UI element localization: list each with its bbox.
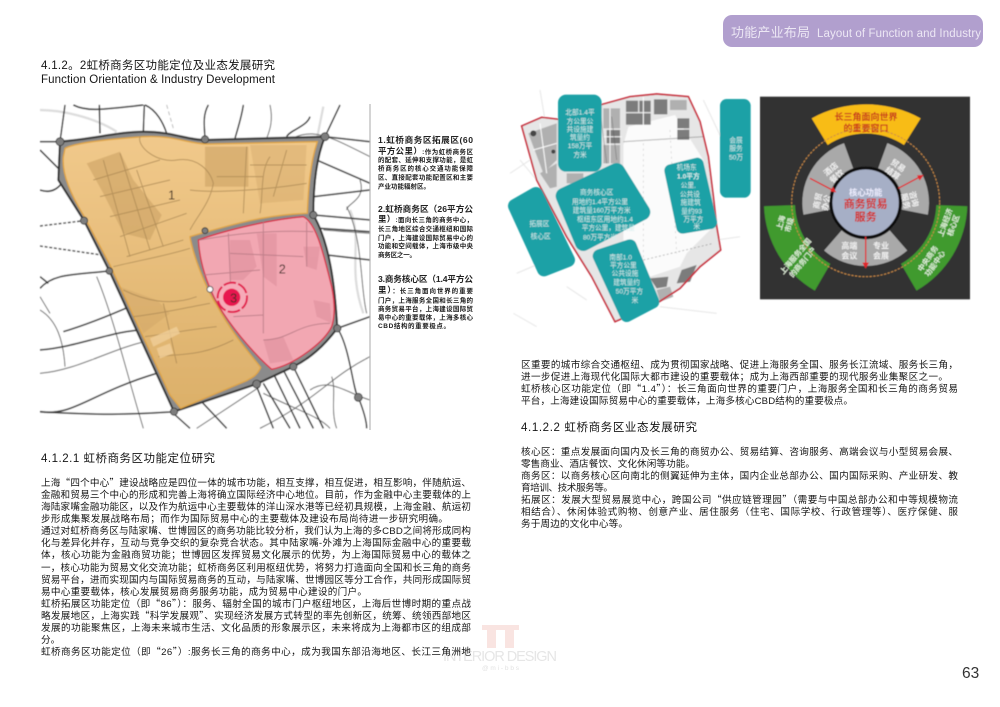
gray sector: upper right: 咨询 bbox=[907, 190, 921, 208]
callout: south: 建筑量约 bbox=[613, 277, 640, 286]
header tag: Layout of Function and Industry: Layout of Function and Industry bbox=[817, 28, 981, 40]
map legend text panel: 门户，上海建设国际贸易中心的 bbox=[378, 233, 474, 242]
gray sector: bottom: 会议 bbox=[841, 250, 857, 260]
page number: 63 bbox=[962, 665, 979, 682]
map zone labels bbox=[168, 188, 286, 306]
body text: right column bottom: 相结合）、休闲体验式购物、创意产业、居住服务（住宅、国际学校、行政管理等）、医疗保健、服 bbox=[521, 506, 958, 518]
gray sector: bottom: 会展 bbox=[873, 250, 889, 260]
callout: east: 公共设 bbox=[680, 190, 700, 199]
callout: core: 枢纽东区用地约1.4 bbox=[577, 214, 633, 223]
site plan base bbox=[510, 90, 740, 327]
green sector: right: 核心区 bbox=[945, 213, 962, 237]
zoning map bbox=[40, 104, 370, 429]
green sector: right bbox=[901, 205, 967, 291]
body text: right column bottom: 育培训、技术服务等。 bbox=[521, 482, 613, 494]
gray sector: upper left: 餐饮 bbox=[827, 167, 846, 185]
map legend text panel: 的配套、延伸和支撑功能，是虹 bbox=[378, 155, 474, 164]
body text: left column: 化与差异化并存，互动与竞争交织的复杂竞合状态。其中陆家嘴-外滩为上海国际金融中心的重要载 bbox=[41, 537, 471, 549]
map legend text panel: 长三角地区综合交通枢纽和国际 bbox=[378, 224, 474, 233]
body text: right column top: 平台，上海建设国际贸易中心的重要载体，上海多核心CBD结构的重要极点。 bbox=[521, 395, 853, 407]
radial function diagram bbox=[760, 97, 970, 299]
callout: east: 量约93 bbox=[681, 206, 702, 215]
callout: right: 50万 bbox=[729, 153, 743, 161]
callout: south: 公共设施 bbox=[612, 269, 639, 278]
map legend text panel: CBD结构的重要极点。 bbox=[378, 321, 450, 330]
watermark bbox=[443, 625, 557, 672]
callout: core: 用地约1.4平方公里 bbox=[572, 197, 628, 206]
body text: left column: 略发展地区，上海实践“科学发展观”、实现经济发展方式转型的率先创新区，统筹、统领西部地区 bbox=[41, 608, 471, 622]
callout: east bbox=[671, 162, 711, 230]
green sector: left: 市级 bbox=[783, 216, 796, 233]
body text: left column: 虹桥商务区功能定位（即“26”）:服务长三角的商务中心，成为我国东部沿海地区、长江三角洲地 bbox=[41, 644, 471, 658]
body text: left column: 体，核心功能为金融商贸功能；世博园区发挥贸易文化展示的优势，为上海国际贸易中心的载体之 bbox=[41, 549, 471, 561]
body text: left column: 贸易平台，进而实现国内与国际贸易商务的互动，与陆家嘴、世博园区等分工合作，共同形成国际贸 bbox=[41, 574, 471, 586]
callout: core: 商务核心区 bbox=[580, 188, 614, 197]
body text: left column: 通过对虹桥商务区与陆家嘴、世博园区的商务功能比较分析，我们认为上海的多CBD之间将形成同构 bbox=[41, 525, 471, 537]
callout: core bbox=[564, 171, 642, 243]
callout: north: 方米 bbox=[573, 150, 587, 159]
map legend text panel: 桥商务区的核心交通功能保障 bbox=[378, 164, 474, 172]
body text: left column bbox=[41, 475, 471, 658]
watermark: @mi-bbs bbox=[482, 665, 520, 672]
green sector: left bbox=[764, 205, 830, 291]
callout: core: 建筑量160万平方米 bbox=[573, 206, 631, 215]
body text: left column: 海陆家嘴金融功能区，以及作为航运中心主要载体的洋山深水港等已经初具规模，上海金融、航运初 bbox=[41, 501, 471, 513]
body text: right column bottom: 拓展区：发展大型贸易展览中心，跨国公司“供应链管理园”（需要与中国总部办公和中等规模物流 bbox=[521, 492, 958, 506]
body text: right column bottom: 零售商业、酒店餐饮、文化休闲等功能。 bbox=[521, 458, 695, 470]
map legend text panel: 1.虹桥商务区拓展区(60 bbox=[378, 134, 473, 145]
callout: south: 50万平方 bbox=[616, 286, 643, 295]
central core circle: 核心功能 bbox=[849, 187, 883, 197]
callout: south: 米 bbox=[632, 296, 639, 305]
gray sector: upper left: 办公 bbox=[819, 194, 832, 211]
callout: south: 南部1.0 bbox=[609, 252, 632, 261]
gray sector: upper left bbox=[802, 143, 853, 215]
callout: east: 万平方 bbox=[683, 214, 704, 223]
yellow sector: gateway to the world: 长三角面向世界 bbox=[835, 111, 897, 122]
map legend text panel: 2.虹桥商务区（26平方公 bbox=[378, 203, 473, 214]
red arrows bbox=[810, 175, 924, 269]
header tag: Layout of Function and Industry bbox=[723, 15, 983, 47]
green sector: right: 功能中心 bbox=[923, 248, 948, 278]
gray sector: upper left: 酒店 bbox=[821, 160, 840, 178]
green sector: right: 上海经济 bbox=[936, 207, 955, 238]
green sector: left: 上海 bbox=[775, 214, 787, 231]
map zone labels: 3 bbox=[230, 292, 237, 306]
body text: right column top bbox=[521, 359, 958, 407]
callout: east: 公里, bbox=[681, 181, 696, 189]
map legend text panel: 易中心的重要载体，上海多核心 bbox=[378, 312, 474, 322]
body text: right column top: 区重要的城市综合交通枢纽、成为贯彻国家战略、促进上海服务全国、服务长江流域、服务长三角， bbox=[521, 359, 958, 371]
callout: west: 拓展区 bbox=[529, 219, 550, 228]
site plan with teal callouts bbox=[510, 90, 751, 327]
central core circle: 商务贸易 bbox=[844, 196, 888, 210]
red site boundary bbox=[522, 94, 721, 322]
map legend text panel: 3.商务核心区（1.4平方公 bbox=[378, 273, 473, 284]
body text: right column bottom: 核心区：重点发展面向国内及长三角的商贸办公、贸易结算、咨询服务、高端会议与小型贸易会展、 bbox=[521, 446, 958, 458]
callout: right: 服务 bbox=[729, 144, 743, 153]
gray sector: upper right: 结算 bbox=[883, 164, 902, 182]
callout: right: 会展 bbox=[729, 136, 743, 145]
watermark: INTERIOR DESIGN bbox=[443, 649, 557, 665]
map legend text panel: 商务区之一。 bbox=[378, 250, 416, 259]
map legend text panel: 功能和空间载体，上海市级中央 bbox=[378, 241, 474, 250]
map legend text panel bbox=[370, 104, 474, 430]
body text: left column: 易中心重要载体，核心发展贸易商务服务功能，成为贸易中心建设的门户。 bbox=[41, 586, 367, 598]
callout: north bbox=[558, 95, 602, 172]
gray sector: upper right: 服务 bbox=[899, 192, 913, 210]
green sector: left: 的商务门户 bbox=[787, 245, 818, 279]
body text: right column bottom bbox=[521, 446, 958, 530]
callout: east: 1.0平方 bbox=[677, 172, 700, 181]
section 4.1.2.1 heading: 4.1.2.1 虹桥商务区功能定位研究 bbox=[41, 451, 216, 465]
map legend text panel: 里）:面向长三角的商务中心， bbox=[378, 214, 473, 224]
callout: east: 米 bbox=[693, 221, 700, 230]
green sector: left: 上海服务全国 bbox=[778, 237, 813, 276]
body text: left column: 分。 bbox=[41, 635, 60, 646]
gray sector: bottom: 专业 bbox=[873, 241, 889, 251]
body text: left column: 上海“四个中心”建设战略应是四位一体的城市功能，相互支撑，相互促进，相互影响，伴随航运、 bbox=[41, 475, 471, 489]
map legend text panel: 门户，上海服务全国和长三角的 bbox=[378, 296, 474, 304]
map legend text panel: 平方公里）:作为虹桥商务区 bbox=[378, 146, 474, 156]
yellow sector: gateway to the world bbox=[812, 104, 921, 145]
body text: left column: 一，核心功能为贸易文化交流功能；虹桥商务区利用枢纽优势，将努力打造面向全国和长三角的商务 bbox=[41, 562, 471, 574]
callout: north: 共设施建 bbox=[567, 125, 594, 134]
map legend text panel: 商务贸易平台，上海建设国际贸 bbox=[378, 304, 474, 313]
body text: right column top: 虹桥核心区功能定位（即“1.4”）：长三角面向世界的重要门户，上海服务全国和长三角的商务贸易 bbox=[521, 381, 958, 395]
body text: left column: 步形成集聚发展战略布局；而作为国际贸易中心的主要载体及建设布局尚待进一步研究明确。 bbox=[41, 513, 448, 525]
map zone labels: 1 bbox=[168, 188, 175, 202]
callout: core: 80万平方米 bbox=[583, 232, 617, 241]
gray sector: bottom: 高端 bbox=[841, 241, 857, 251]
map zone labels: 2 bbox=[279, 262, 286, 276]
callout: east: 施建筑 bbox=[681, 198, 701, 207]
body text: left column: 虹桥拓展区功能定位（即“86”）：服务、辐射全国的城市门户枢纽地区，上海后世博时期的重点战 bbox=[41, 596, 471, 610]
gray sector: upper left: 商贸 bbox=[811, 192, 824, 210]
body text: right column top: 进一步促进上海现代化国际大都市建设的重要载体；成为上海西部重要的现代服务业集聚区之一。 bbox=[521, 371, 948, 383]
map legend text panel: 产业功能辐射区。 bbox=[378, 182, 430, 190]
central core circle: 服务 bbox=[855, 210, 877, 224]
callout: right bbox=[720, 99, 751, 198]
callout: west bbox=[515, 194, 568, 269]
green sector: right: 中央商务 bbox=[916, 243, 940, 273]
central core circle bbox=[831, 168, 900, 237]
page title: 4.1.2。2虹桥商务区功能定位及业态发展研究 bbox=[41, 58, 276, 72]
map legend text panel: 里）：长三角面向世界的重要 bbox=[378, 285, 474, 295]
gray sector: upper right: 贸易 bbox=[889, 157, 908, 174]
callout: north: 北部1.4平 bbox=[565, 108, 595, 117]
callout: north: 158万平 bbox=[568, 142, 593, 150]
gray sector: bottom bbox=[824, 230, 907, 266]
section 4.1.2.2 heading: 4.1.2.2 虹桥商务区业态发展研究 bbox=[521, 420, 698, 434]
header tag: Layout of Function and Industry: 功能产业布局 bbox=[731, 25, 810, 40]
page title: Function Orientation & Industry Development bbox=[41, 74, 276, 86]
callout: core: 平方公里，建筑量 bbox=[582, 223, 635, 232]
gray sector: upper right bbox=[878, 143, 929, 215]
callout: north: 方公里公 bbox=[567, 116, 594, 125]
body text: left column: 金融和贸易三个中心的形成和完善上海将确立国际经济中心地位。目前，作为金融中心主要载体的上 bbox=[41, 489, 471, 501]
body text: right column bottom: 商务区：以商务核心区向南北的侧翼延伸为主体，国内企业总部办公、国内国际采购、产业研发、教 bbox=[521, 470, 958, 482]
callout: south bbox=[599, 246, 653, 315]
body text: right column bottom: 务于周边的文化中心等。 bbox=[521, 518, 628, 530]
callout: south: 平方公里 bbox=[610, 260, 637, 269]
body text: left column: 发展的功能聚焦区，上海未来城市生活、文化品质的形象展示区，未来将成为上海都市区的组成部 bbox=[41, 622, 471, 634]
page title bbox=[41, 58, 276, 86]
map legend text panel: 区、直接配套功能配置区和主要 bbox=[378, 172, 474, 182]
callout: north: 筑量约 bbox=[570, 132, 590, 141]
yellow sector: gateway to the world: 的重要窗口 bbox=[844, 123, 888, 134]
callout: east: 机场东 bbox=[677, 162, 697, 171]
callout: west: 核心区 bbox=[531, 232, 551, 241]
